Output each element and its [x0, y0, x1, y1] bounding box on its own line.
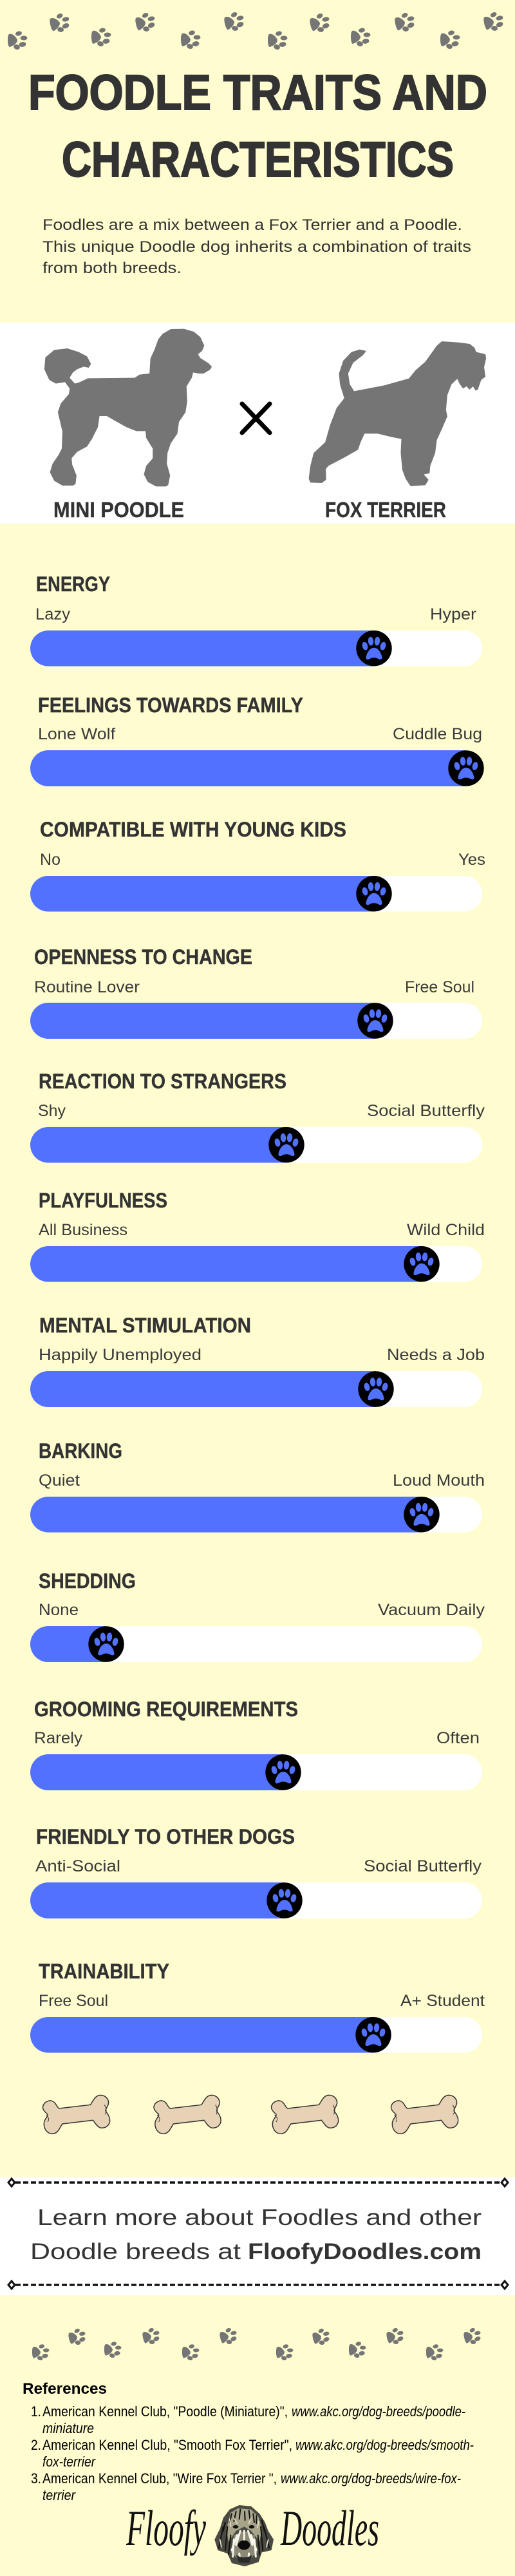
trait: energy: Lazy [35, 605, 71, 623]
trait: playfulness: PLAYFULNESS [39, 1189, 167, 1212]
trait: openness to change: Routine Lover [34, 978, 140, 996]
trait: mental stimulation: Needs a Job [387, 1346, 485, 1364]
references: American Kennel Club, "Wire Fox Terrier ", [42, 2470, 277, 2486]
title [28, 65, 487, 187]
label: mini poodle: MINI POODLE [53, 498, 184, 522]
references: 2. [31, 2437, 41, 2453]
trait: grooming requirements: Often [436, 1729, 480, 1747]
references: American Kennel Club, "Smooth Fox Terrier", [42, 2437, 292, 2453]
trait: grooming requirements: GROOMING REQUIREMENTS [34, 1698, 298, 1721]
references: 1. [31, 2403, 41, 2420]
references: 3. [31, 2470, 41, 2486]
icon: doodle dog head [214, 2505, 274, 2566]
label: fox terrier: FOX TERRIER [325, 498, 446, 522]
trait: barking: Quiet [39, 1472, 80, 1490]
trait: trainability: Free Soul [39, 1992, 108, 2010]
trait: compatible with young kids: Yes [458, 851, 485, 869]
trait: compatible with young kids: No [40, 851, 61, 869]
references: www.akc.org/dog-breeds/smooth- [295, 2437, 474, 2453]
trait: shedding [30, 1569, 485, 1662]
trait: friendly to other dogs [30, 1825, 482, 1918]
text: learn more [30, 2205, 482, 2264]
trait: mental stimulation: Happily Unemployed [39, 1346, 201, 1364]
trait: playfulness [30, 1189, 485, 1282]
decorative paw prints row: top [8, 10, 505, 50]
references [23, 2380, 474, 2503]
references: www.akc.org/dog-breeds/poodle- [292, 2403, 465, 2420]
trait: openness to change [30, 945, 482, 1039]
trait: trainability [30, 1960, 485, 2053]
trait: playfulness: All Business [39, 1221, 127, 1239]
divider: bottom dashed line [8, 2281, 508, 2289]
icon: fox terrier silhouette [309, 341, 486, 486]
decorative paw prints row: bottom [32, 2326, 483, 2361]
trait: feelings towards family: Lone Wolf [38, 725, 115, 743]
trait: feelings towards family: FEELINGS TOWARDS FAMILY [38, 694, 303, 717]
logo: floofy doodles: Doodles [280, 2500, 379, 2556]
trait: reaction to strangers: REACTION TO STRANGERS [39, 1070, 286, 1093]
panel: call to action [0, 2177, 515, 2295]
trait: reaction to strangers: Social Butterfly [367, 1102, 485, 1120]
trait: compatible with young kids: COMPATIBLE WITH YOUNG KIDS [40, 818, 346, 841]
trait: energy [30, 573, 482, 666]
trait: barking [30, 1439, 485, 1533]
trait: playfulness: Wild Child [407, 1221, 485, 1239]
trait: feelings towards family: Cuddle Bug [393, 725, 482, 743]
trait: energy: Hyper [430, 605, 476, 623]
references: miniature [42, 2420, 94, 2436]
trait: reaction to strangers [30, 1070, 485, 1163]
trait: reaction to strangers: Shy [38, 1102, 66, 1120]
trait: openness to change: Free Soul [405, 978, 474, 996]
trait: openness to change: OPENNESS TO CHANGE [34, 945, 252, 969]
icon: mini poodle silhouette [44, 329, 212, 486]
logo: floofy doodles [126, 2500, 379, 2566]
trait: shedding: Vacuum Daily [378, 1601, 485, 1619]
references: fox-terrier [42, 2454, 96, 2470]
logo: floofy doodles: Floofy [126, 2500, 206, 2556]
trait: trainability: TRAINABILITY [39, 1960, 169, 1983]
trait: energy: ENERGY [36, 573, 110, 596]
references: www.akc.org/dog-breeds/wire-fox- [281, 2470, 461, 2486]
icon: cross symbol [242, 404, 270, 433]
panel: parent breeds [0, 323, 515, 524]
text: learn more: Doodle breeds at [30, 2239, 241, 2264]
text: learn more: Learn more about Foodles and other [37, 2205, 482, 2230]
intro paragraph: from both breeds. [42, 260, 182, 277]
trait: friendly to other dogs: FRIENDLY TO OTHER DOGS [36, 1825, 295, 1848]
trait: friendly to other dogs: Anti-Social [35, 1857, 120, 1875]
trait: grooming requirements [30, 1698, 482, 1790]
intro paragraph [42, 216, 471, 277]
divider: top dashed line [8, 2179, 508, 2186]
trait: barking: Loud Mouth [393, 1472, 485, 1490]
trait: feelings towards family [30, 694, 484, 786]
trait: mental stimulation [30, 1314, 485, 1407]
intro paragraph: This unique Doodle dog inherits a combination of traits [42, 238, 471, 256]
text: learn more: FloofyDoodles.com [248, 2239, 482, 2264]
trait: grooming requirements: Rarely [34, 1729, 83, 1747]
trait: shedding: None [39, 1601, 79, 1619]
references: terrier [42, 2487, 76, 2503]
trait: barking: BARKING [39, 1439, 122, 1463]
trait: shedding: SHEDDING [39, 1569, 136, 1593]
references: American Kennel Club, "Poodle (Miniature)", [42, 2403, 288, 2420]
references: References [23, 2380, 107, 2398]
intro paragraph: Foodles are a mix between a Fox Terrier and a Poodle. [42, 216, 462, 234]
trait: compatible with young kids [30, 818, 485, 912]
icon row: dog bones [42, 2095, 458, 2134]
trait: trainability: A+ Student [400, 1992, 485, 2010]
trait: mental stimulation: MENTAL STIMULATION [39, 1314, 251, 1337]
trait: friendly to other dogs: Social Butterfly [364, 1857, 482, 1875]
